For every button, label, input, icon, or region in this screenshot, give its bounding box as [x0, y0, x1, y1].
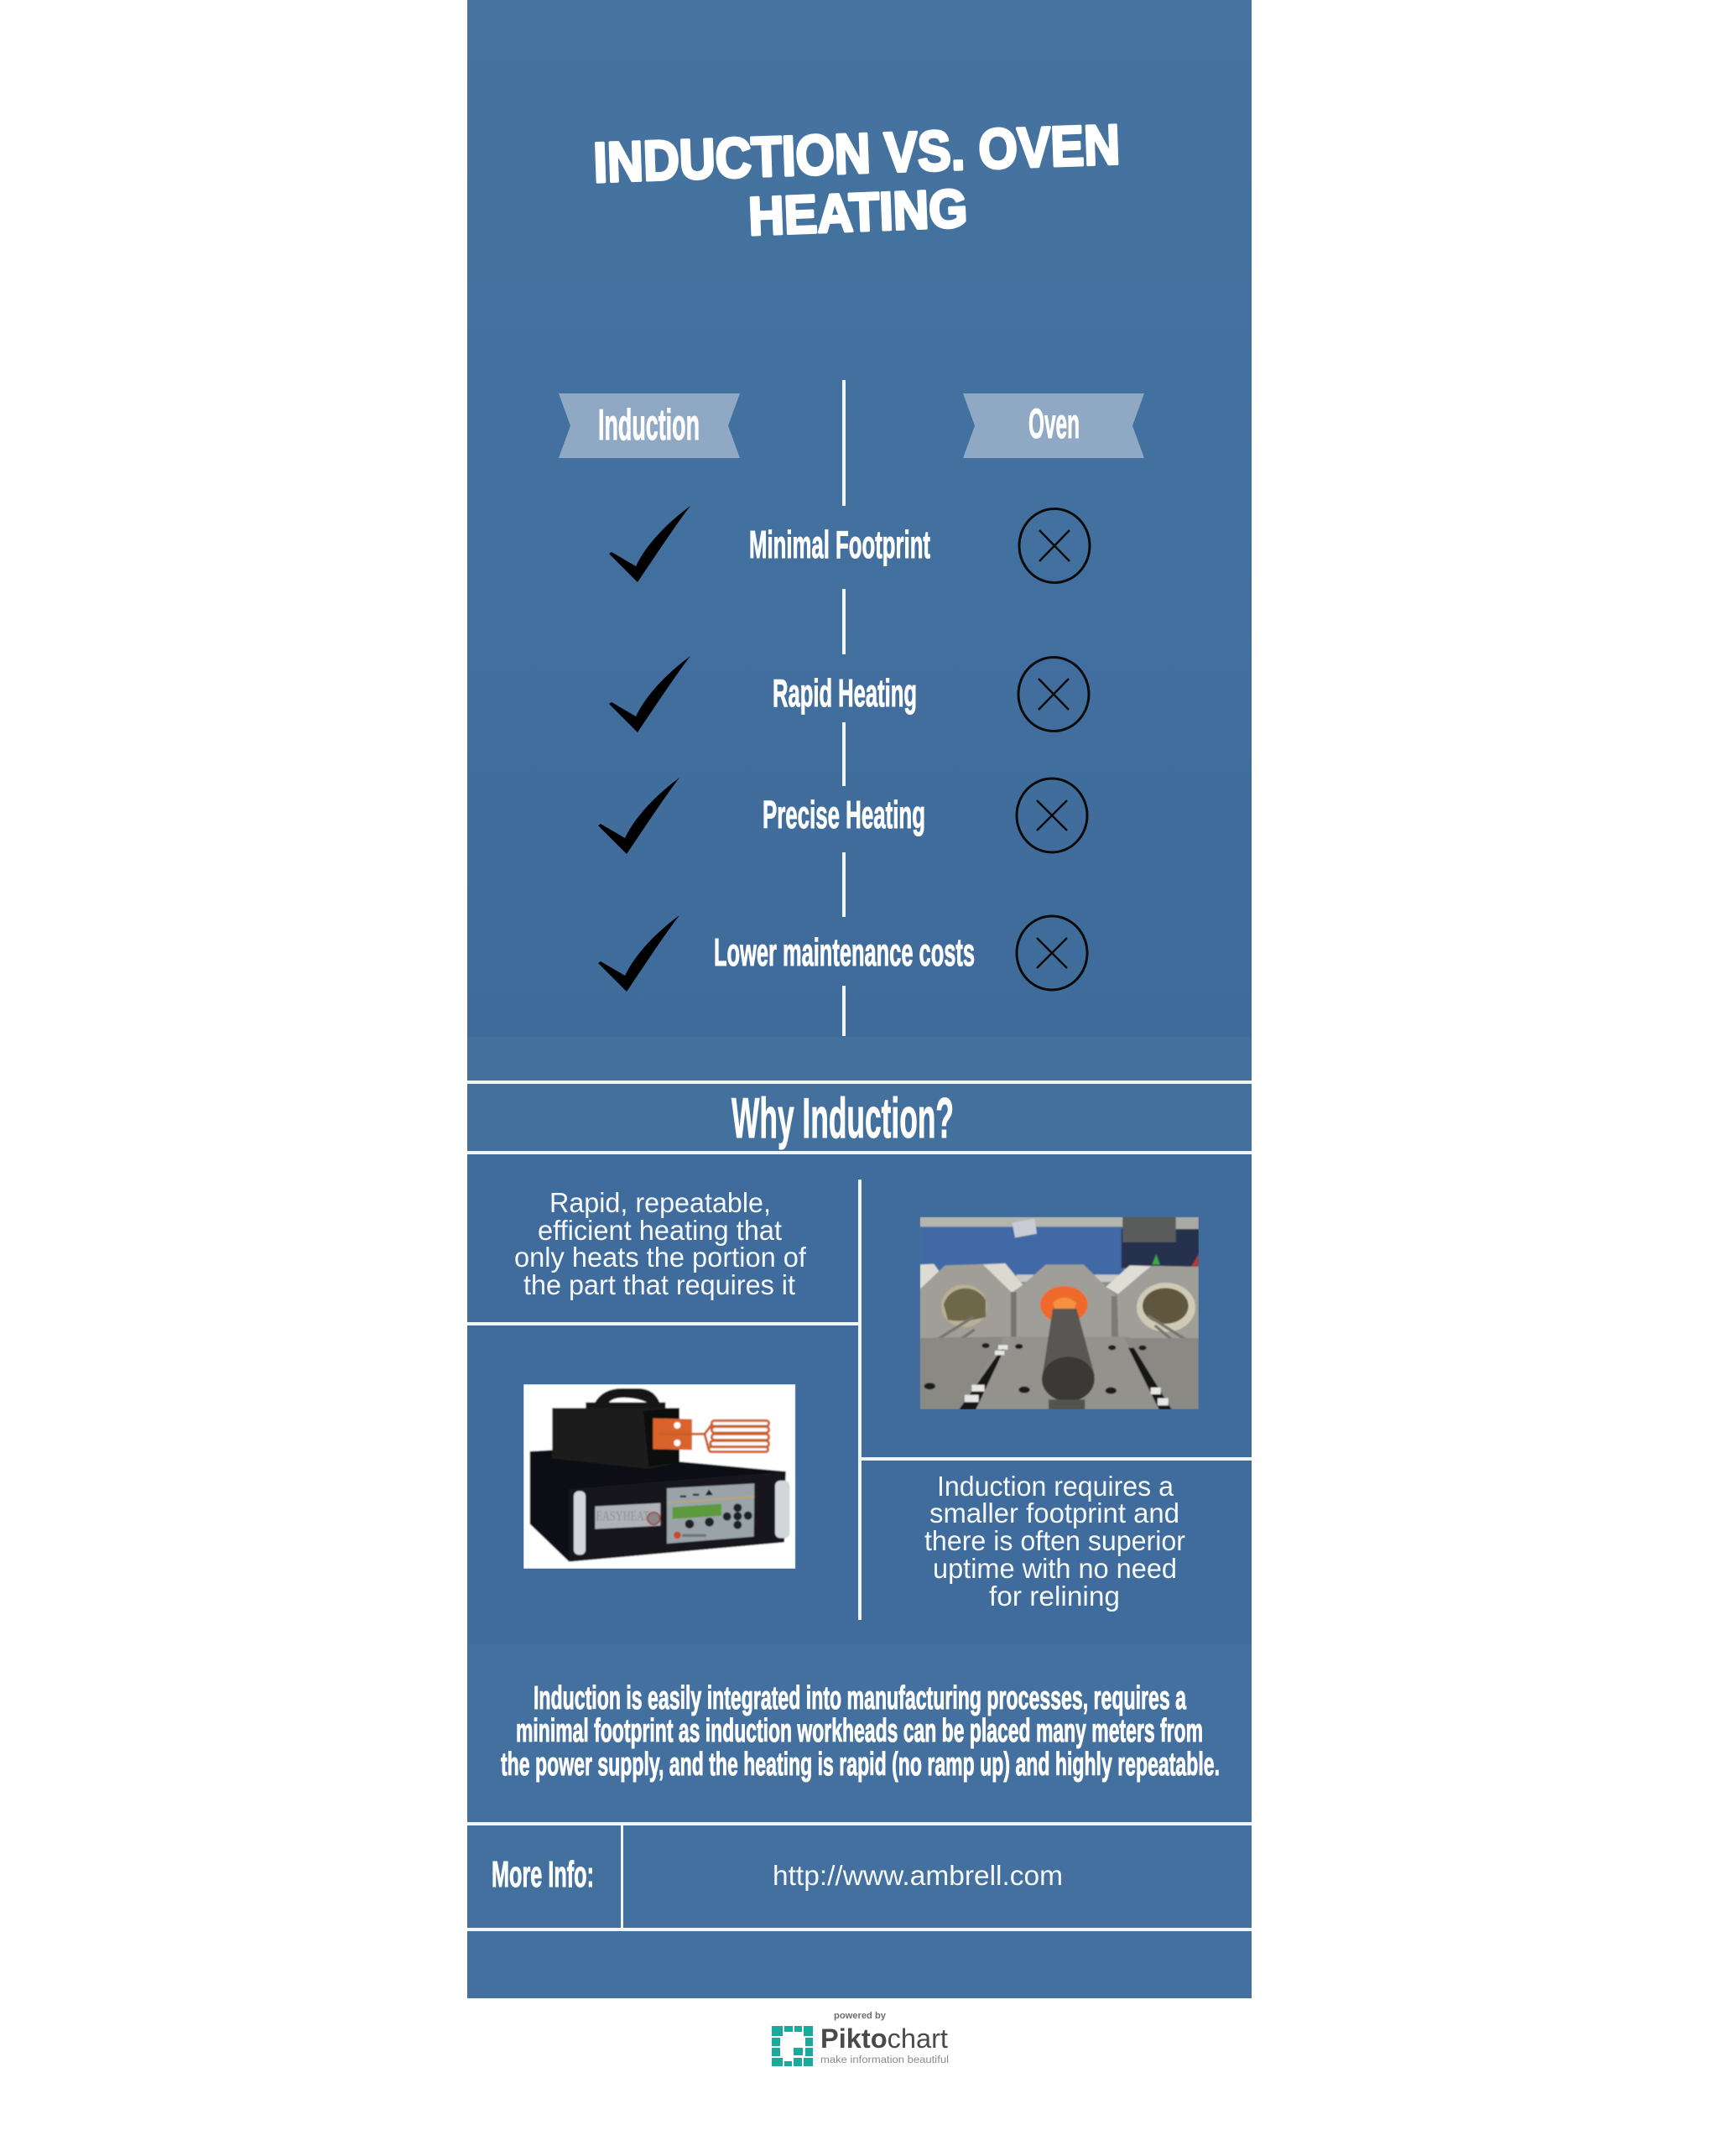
- text block: summary paragraph: [501, 1680, 1220, 1783]
- text block: summary paragraph: the power supply, and the heating is rapid (no ramp up) and highly repeatable.: [501, 1747, 1220, 1783]
- title: INDUCTION VS. OVEN: [592, 113, 1121, 195]
- title: [592, 113, 1121, 247]
- panel: blue background: [467, 0, 1252, 1998]
- text block: smaller footprint: smaller footprint and: [929, 1497, 1179, 1528]
- footer: Piktochart branding: Piktochart: [820, 2023, 948, 2054]
- icon: check: [609, 506, 690, 582]
- text block: summary paragraph: Induction is easily integrated into manufacturing processes, requires a: [534, 1680, 1186, 1716]
- icon: cross in circle: [1017, 779, 1087, 852]
- label: Rapid Heating: Rapid Heating: [773, 671, 917, 715]
- footer: Piktochart branding: powered by: [834, 2011, 887, 2021]
- ribbon: Induction: Induction: [598, 401, 700, 450]
- section rules: [467, 1081, 1252, 1931]
- text block: smaller footprint: [924, 1471, 1185, 1612]
- icon: check: [609, 656, 690, 732]
- photo: induction heating coils: [920, 1217, 1199, 1409]
- icon: cross in circle: [1019, 508, 1090, 582]
- row: Rapid Heating: [609, 656, 1089, 732]
- infographic canvas: [467, 0, 1252, 2066]
- photo: EasyHeat machine: EASYHEAT: [596, 1508, 649, 1524]
- comparison center divider: [842, 380, 846, 1036]
- heading: Why Induction?: Why Induction?: [731, 1086, 954, 1150]
- label: Lower maintenance costs: Lower maintenance costs: [714, 930, 975, 974]
- row: Precise Heating: [598, 778, 1087, 854]
- link text: http://www.ambrell.com: [773, 1860, 1063, 1891]
- text block: rapid repeatable: [514, 1187, 807, 1300]
- ribbon: Oven: [963, 393, 1144, 458]
- text block: smaller footprint: there is often superior: [924, 1525, 1185, 1556]
- label: Minimal Footprint: Minimal Footprint: [749, 523, 930, 566]
- icon: Piktochart logo: [772, 2026, 813, 2066]
- icon: check: [598, 915, 679, 992]
- text block: summary paragraph: minimal footprint as induction workheads can be placed many meters from: [516, 1713, 1203, 1749]
- ribbon: Oven: Oven: [1028, 400, 1080, 447]
- text block: rapid repeatable: only heats the portion of: [514, 1242, 807, 1273]
- title: HEATING: [747, 178, 968, 247]
- footer: Piktochart branding: make information beautiful: [820, 2055, 949, 2065]
- photo: EasyHeat machine: [523, 1384, 795, 1569]
- label: More Info: More Info:: [492, 1854, 594, 1895]
- icon: check: [598, 778, 679, 854]
- text block: smaller footprint: Induction requires a: [937, 1471, 1174, 1502]
- ribbon: Induction: [559, 393, 740, 458]
- icon: cross in circle: [1017, 916, 1087, 990]
- text block: rapid repeatable: Rapid, repeatable,: [549, 1187, 771, 1218]
- footer: Piktochart branding: [772, 2011, 949, 2066]
- row: Minimal Footprint: [609, 506, 1090, 582]
- label: Precise Heating: Precise Heating: [763, 793, 925, 836]
- text block: smaller footprint: uptime with no need: [933, 1553, 1177, 1584]
- text block: smaller footprint: for relining: [989, 1581, 1120, 1612]
- icon: cross in circle: [1018, 658, 1089, 732]
- text block: rapid repeatable: the part that requires it: [523, 1269, 795, 1300]
- text block: rapid repeatable: efficient heating that: [538, 1215, 782, 1246]
- row: Lower maintenance costs: [598, 915, 1087, 992]
